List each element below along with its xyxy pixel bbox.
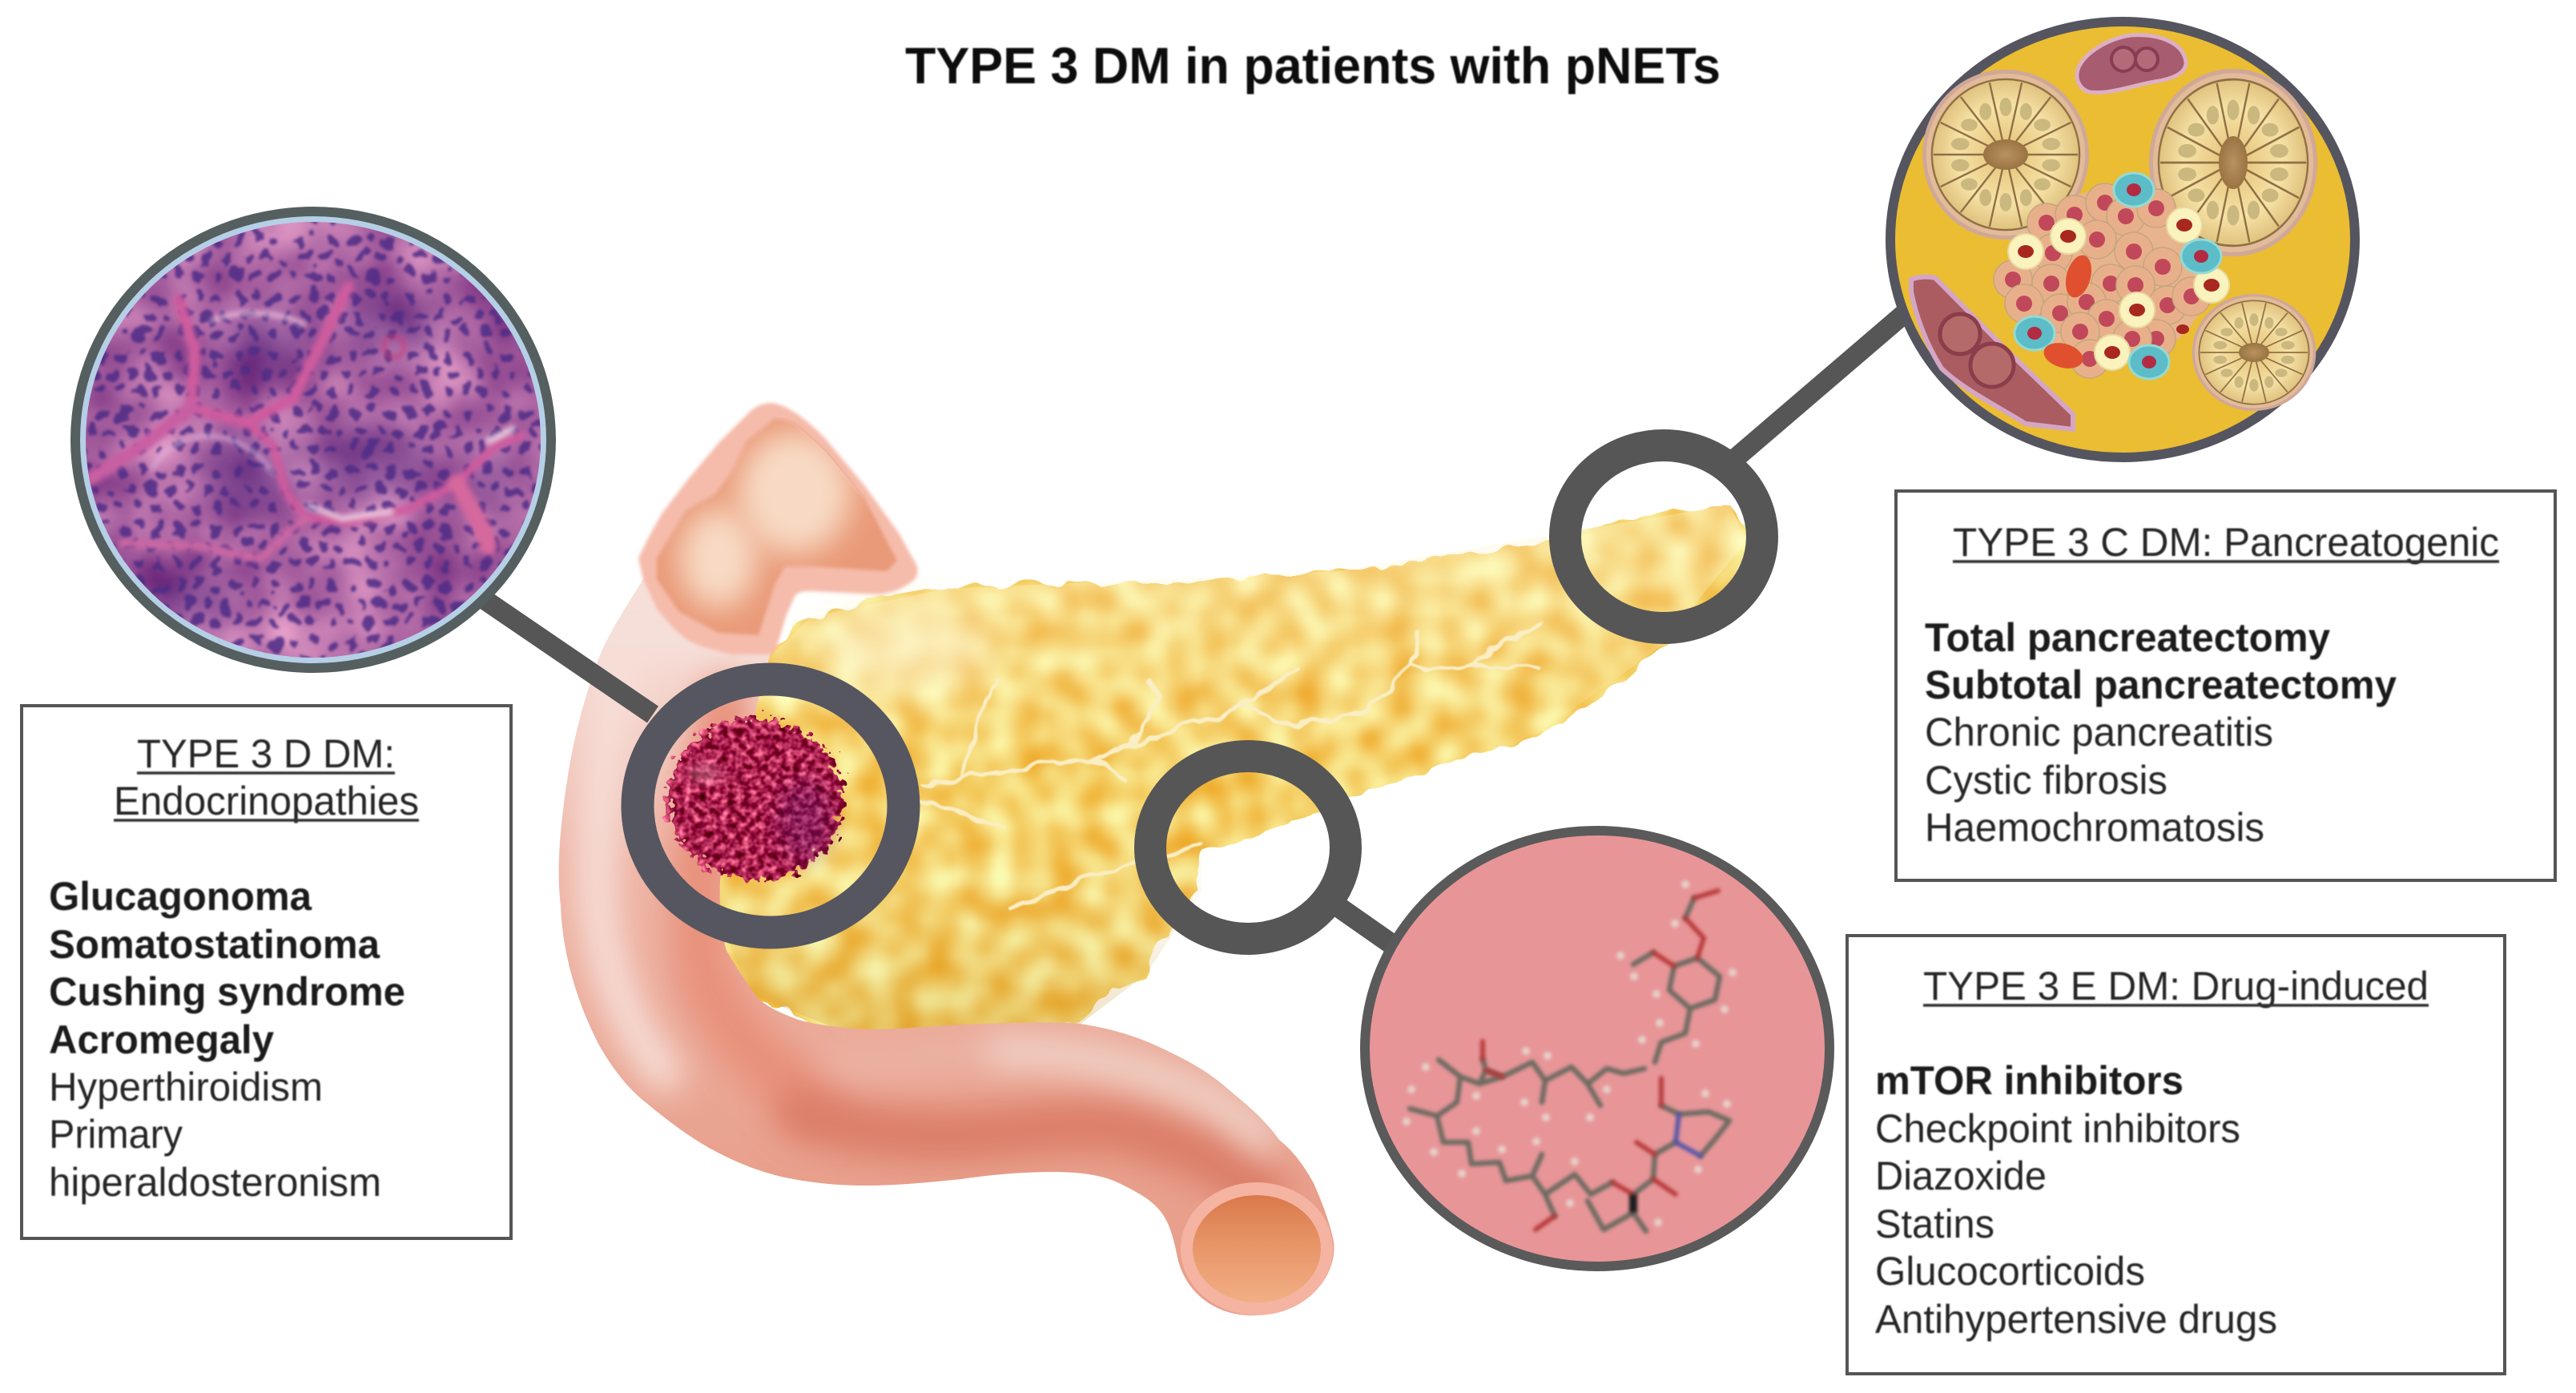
molecule dark stereo bond <box>1629 1194 1637 1213</box>
connector: lens C to islet circle <box>1732 308 1910 461</box>
list: endocrinopathies: Somatostatinoma <box>49 922 380 967</box>
list: endocrinopathies: Hyperthiroidism <box>49 1065 323 1109</box>
list: drug classes: Statins <box>1875 1202 1994 1246</box>
molecule oxygen bonds <box>1483 891 1718 1230</box>
connector: lens D to histology circle <box>484 599 653 715</box>
connector: lens E to molecule circle <box>1334 904 1398 948</box>
molecule hydrogen atoms <box>1403 880 1737 1226</box>
list: drug classes: Checkpoint inhibitors <box>1875 1106 2240 1151</box>
stroma strands <box>88 287 521 559</box>
list: endocrinopathies: Acromegaly <box>49 1017 274 1062</box>
list: pancreatogenic causes <box>1925 615 2397 850</box>
pancreas shading <box>705 505 1746 1033</box>
list: drug classes: mTOR inhibitors <box>1875 1058 2184 1103</box>
list: endocrinopathies: Cushing syndrome <box>49 969 405 1014</box>
magnifier lens: pancreatic tail <box>1565 445 1762 628</box>
pancreas body with lobules <box>689 505 1746 1041</box>
molecule skeleton <box>1410 898 1729 1231</box>
list: drug classes: Antihypertensive drugs <box>1875 1297 2277 1342</box>
islet cell cluster <box>1994 173 2229 379</box>
list: pancreatogenic causes: Cystic fibrosis <box>1925 758 2167 803</box>
duodenal tube opening <box>1181 1182 1333 1315</box>
cell nuclei <box>86 222 541 658</box>
heading: type 3 E DM: TYPE 3 E DM: Drug-induced <box>1923 964 2429 1009</box>
pancreatic ducts <box>921 624 1542 910</box>
list: drug classes: Diazoxide <box>1875 1153 2047 1198</box>
histology background <box>86 222 541 658</box>
capillary lower left <box>1911 277 2073 429</box>
heading: type 3 C DM: TYPE 3 C DM: Pancreatogenic <box>1953 520 2499 565</box>
duodenum <box>559 403 1334 1315</box>
list: endocrinopathies: Primary <box>49 1112 183 1157</box>
pancreas <box>689 505 1746 1041</box>
list: endocrinopathies: hiperaldosteronism <box>49 1160 381 1205</box>
acinus upper left <box>1924 71 2087 238</box>
list: drug classes <box>1875 1058 2277 1342</box>
list: pancreatogenic causes: Subtotal pancreatectomy <box>1925 662 2397 707</box>
magnifier lens: tumor <box>638 679 904 932</box>
heading: type 3 D DM: Endocrinopathies <box>114 779 419 823</box>
acinus lower right <box>2193 296 2315 409</box>
list: pancreatogenic causes: Chronic pancreatitis <box>1925 710 2273 755</box>
panel: type 3 D DM endocrinopathies <box>22 706 511 1238</box>
title: TYPE 3 DM in patients with pNETs <box>905 37 1721 95</box>
islet circle: pancreatic tissue illustration <box>1890 22 2355 457</box>
molecule nitrogen bonds <box>1676 1114 1701 1156</box>
capillary top <box>2077 35 2186 92</box>
list: pancreatogenic causes: Haemochromatosis <box>1925 805 2264 850</box>
list: pancreatogenic causes: Total pancreatectomy <box>1925 615 2330 660</box>
list: endocrinopathies: Glucagonoma <box>49 874 312 919</box>
duodenum tube <box>559 561 1334 1315</box>
heading: type 3 D DM <box>114 731 419 823</box>
dense tumour nests <box>144 296 513 625</box>
acinus upper right <box>2151 71 2316 254</box>
panel: type 3 C DM pancreatogenic <box>1896 491 2555 880</box>
panel: type 3 E DM drug-induced <box>1847 936 2505 1374</box>
heading: type 3 D DM: TYPE 3 D DM: <box>137 731 395 776</box>
list: drug classes: Glucocorticoids <box>1875 1249 2145 1294</box>
molecule circle: drug structure <box>1365 831 1829 1266</box>
duodenal hood cavity <box>657 419 897 635</box>
list: endocrinopathies <box>49 874 405 1205</box>
duodenal hood rim <box>638 403 918 654</box>
histology circle: endocrine tumour tissue <box>64 200 569 681</box>
tumor in pancreatic head <box>667 719 843 880</box>
magnifier lens: pancreatic body <box>1150 756 1346 939</box>
